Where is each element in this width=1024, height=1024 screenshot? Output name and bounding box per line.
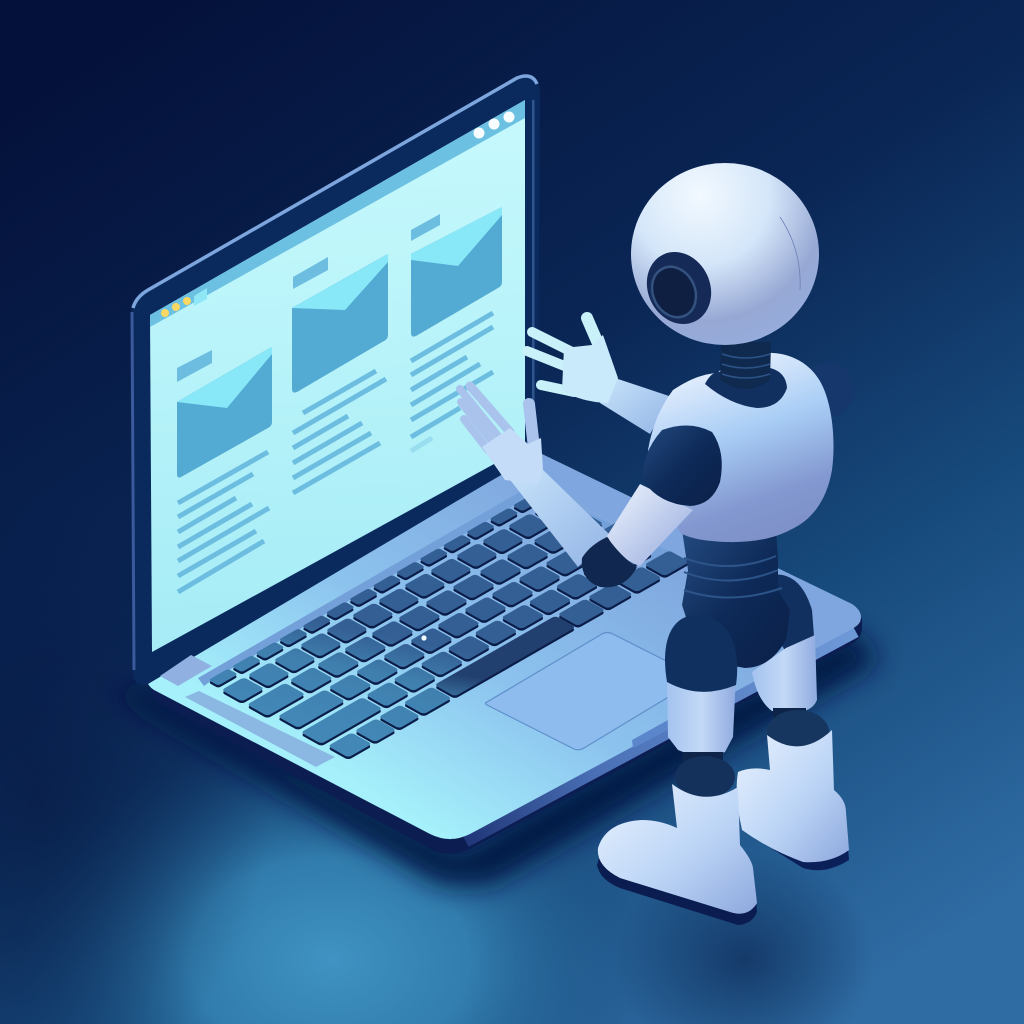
- front knee: [675, 752, 735, 798]
- waist: [682, 530, 790, 668]
- lid left rim: [132, 312, 134, 670]
- shadow under laptop: [110, 630, 880, 885]
- column 3: [411, 207, 502, 451]
- touchpad: [486, 632, 680, 750]
- collar: [705, 368, 787, 408]
- head: [631, 163, 819, 345]
- elbow: [582, 537, 637, 587]
- speaker grille: [185, 691, 335, 767]
- browser title bar: [150, 100, 525, 327]
- window dots yellow: [161, 297, 191, 317]
- neck: [720, 342, 771, 389]
- column 1: [177, 347, 272, 592]
- screen: [150, 100, 525, 652]
- keyboard well strip: [198, 486, 688, 686]
- robot back hand and arm: [527, 318, 672, 434]
- back boot: [737, 730, 849, 870]
- front thigh: [667, 675, 736, 756]
- back hip: [760, 574, 814, 652]
- front upper arm: [607, 484, 693, 566]
- laptop: [131, 75, 862, 854]
- back thigh: [752, 635, 817, 712]
- eye lens: [644, 260, 704, 324]
- right shoulder ball: [800, 363, 854, 417]
- laptop deck: [147, 453, 861, 839]
- hinge notch: [632, 720, 668, 748]
- robot: [460, 163, 854, 925]
- left hinge: [160, 655, 212, 686]
- keyboard: [206, 481, 694, 762]
- robot front forearm and hand: [460, 386, 610, 567]
- front hip: [665, 615, 737, 692]
- back knee: [767, 708, 829, 754]
- window dots white: [474, 112, 514, 138]
- laptop base side: [152, 618, 862, 854]
- column 2: [292, 254, 388, 493]
- front boot: [597, 784, 757, 925]
- laptop lid: [131, 75, 540, 685]
- shoulder joint: [643, 425, 722, 506]
- lid top rim highlight: [133, 76, 537, 308]
- address tab: [194, 288, 207, 306]
- torso: [648, 353, 834, 542]
- eye socket: [635, 241, 723, 335]
